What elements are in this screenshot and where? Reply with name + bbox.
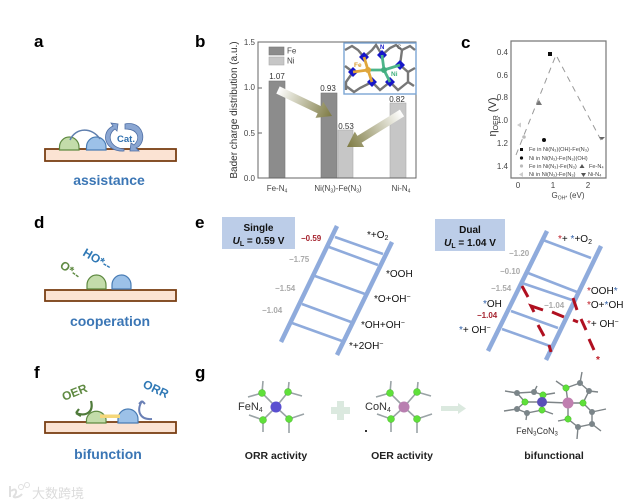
- panel: e single ladder: [195, 213, 413, 355]
- x labels: 3: [356, 188, 359, 194]
- species labels: −: [379, 341, 383, 348]
- arrow: Fe to Ni(N3)-Fe(N3): [276, 86, 332, 118]
- species labels: *+O: [367, 230, 385, 241]
- panel: d cooperation: [34, 213, 176, 329]
- y axis title: Bader charge distribution (a.u.): [229, 41, 240, 179]
- species labels: [349, 230, 413, 352]
- heading: f: f: [34, 363, 40, 382]
- callout: dual: = 1.04 V: [456, 238, 496, 249]
- arrow: ORR: [139, 401, 152, 419]
- y axis title: η: [487, 130, 499, 137]
- x labels: )-Fe(N: [333, 184, 356, 193]
- panel: c volcano plot: [461, 33, 606, 202]
- y tick labels: 1.0: [244, 83, 256, 92]
- panel: b bar chart: [195, 32, 416, 194]
- red dashed ladder: [522, 286, 594, 352]
- axes: [511, 41, 606, 178]
- energy values: −1.04: [262, 306, 283, 315]
- data points: [517, 52, 605, 142]
- y tick labels: 1.0: [497, 116, 509, 125]
- label: Cat.: Cat.: [117, 134, 135, 145]
- x labels: Ni(N: [314, 184, 330, 193]
- inset: structure: [344, 43, 416, 94]
- y tick labels: [497, 48, 509, 171]
- species labels: *O+*OH: [587, 300, 623, 311]
- arrow: Ni to Ni(N3)-Fe(N3): [347, 110, 404, 147]
- arrow: reaction: [441, 403, 466, 414]
- energy values: [477, 249, 565, 320]
- y tick labels: 1.2: [497, 139, 509, 148]
- callout: dual: Dual: [459, 225, 481, 236]
- y tick labels: 1.4: [497, 162, 509, 171]
- species labels: 2: [385, 235, 389, 242]
- x tick labels: 2: [586, 181, 591, 190]
- species labels: *+2OH: [349, 341, 379, 352]
- inset: structure: Fe: [354, 62, 362, 69]
- caption: ORR activity: ORR activity: [245, 450, 307, 462]
- label: OER: OER: [60, 381, 90, 404]
- green catalyst dome a: [60, 137, 79, 150]
- energy values: −1.20: [509, 249, 530, 258]
- legend: [519, 147, 604, 178]
- inset: structure: C: [397, 45, 402, 51]
- blue dome f: [118, 409, 138, 423]
- legend: Ni: [287, 56, 295, 66]
- heading: g: g: [195, 363, 205, 382]
- callout: dual: [435, 219, 505, 251]
- species labels: *+ OH: [459, 325, 487, 336]
- caption: bifunctional: bifunctional: [524, 450, 584, 462]
- x axis title: OH*: [558, 196, 567, 202]
- energy values: −0.10: [500, 267, 521, 276]
- species labels: *OOH: [386, 269, 413, 280]
- substrate f: [45, 422, 176, 433]
- panel: f bifunction: [10, 363, 176, 502]
- heading: d: d: [34, 213, 44, 232]
- y tick labels: 0.8: [497, 93, 509, 102]
- arrow: transfer between sites: [70, 130, 100, 140]
- energy values: −0.59: [301, 234, 322, 243]
- x labels: ): [359, 184, 362, 193]
- volcano dashed lines: [516, 55, 602, 155]
- molecule: FeN4: FeN: [238, 401, 259, 413]
- callout: single: L: [240, 241, 245, 248]
- species labels: −: [615, 319, 619, 326]
- energy values: −1.54: [275, 284, 296, 293]
- species labels: *+ OH: [587, 319, 615, 330]
- watermark: 大数跨境: [32, 483, 84, 502]
- callout: dual: L: [451, 243, 456, 250]
- green dome f: [86, 411, 106, 423]
- heading: c: c: [461, 33, 470, 52]
- heading: a: a: [34, 32, 44, 51]
- energy values: [262, 234, 322, 315]
- y tick labels: 0.0: [244, 174, 256, 183]
- y tick labels: 0.5: [244, 129, 256, 138]
- legend: Fe in Ni(N₃)(OH)-Fe(N₃): [529, 147, 589, 153]
- inset: structure: N: [380, 45, 384, 51]
- species labels: −: [487, 325, 491, 332]
- x axis title: (eV): [567, 191, 585, 200]
- label: O*: O*--: [57, 258, 83, 282]
- heading: b: b: [195, 32, 205, 51]
- molecule: CoN4: 4: [387, 407, 391, 414]
- value labels: 0.93: [320, 84, 336, 93]
- legend: [269, 46, 297, 66]
- value labels: 0.53: [338, 122, 354, 131]
- species labels: [459, 234, 623, 366]
- inset: structure: Ni: [391, 71, 398, 78]
- panel: e dual ladder: [435, 219, 623, 366]
- molecule: FeN3CoN3: FeN: [516, 426, 533, 436]
- legend: Ni in Ni(N₃)-Fe(N₃): [529, 172, 576, 178]
- x labels: 4: [284, 188, 288, 194]
- y tick labels: [244, 38, 256, 183]
- green dome d: [87, 275, 106, 289]
- watermark: [10, 482, 84, 502]
- molecule: FeN4: [238, 381, 304, 433]
- connector: [100, 414, 120, 418]
- panel: g molecules: [195, 363, 606, 462]
- molecule: FeN3CoN3: [504, 372, 606, 439]
- species labels: *OOH*: [587, 286, 618, 297]
- bars: [269, 81, 406, 178]
- species labels: *OH+OH: [361, 320, 401, 331]
- heading: e: e: [195, 213, 204, 232]
- callout: single: = 0.59 V: [244, 236, 285, 247]
- y tick labels: 0.6: [497, 71, 509, 80]
- y tick labels: 0.4: [497, 48, 509, 57]
- label: HO*: HO*--: [80, 245, 114, 273]
- legend: Ni in Ni(N₃)-Fe(N₃)(OH): [529, 156, 588, 162]
- energy values: −1.54: [491, 284, 512, 293]
- caption: bifunction: bifunction: [74, 446, 142, 462]
- x labels: 4: [408, 188, 411, 194]
- value labels: 1.07: [269, 72, 285, 81]
- x labels: [267, 184, 411, 194]
- y tick labels: 1.5: [244, 38, 256, 47]
- value labels: [269, 72, 405, 131]
- species labels: 2: [588, 239, 592, 246]
- x tick labels: 1: [551, 181, 556, 190]
- substrate a: [45, 149, 176, 161]
- caption: assistance: assistance: [73, 172, 145, 188]
- substrate d: [45, 290, 176, 301]
- molecule: FeN3CoN3: 3: [533, 432, 537, 438]
- x labels: Fe-N: [267, 184, 284, 193]
- molecule: CoN4: [365, 381, 432, 433]
- species labels: *+ *+O: [558, 234, 588, 245]
- x tick labels: [516, 181, 591, 190]
- icon: plus: [331, 401, 350, 420]
- x labels: Ni-N: [392, 184, 408, 193]
- blue catalyst dome a: [86, 137, 106, 150]
- ladder: [488, 231, 601, 360]
- energy values: −1.04: [477, 311, 498, 320]
- ladder: [281, 226, 392, 355]
- legend: Fe in Ni(N₃)-Fe(N₃): [529, 164, 577, 170]
- legend: Fe: [287, 46, 297, 56]
- x axis title: G: [551, 191, 558, 200]
- arrow: catalytic cycle: [105, 123, 143, 151]
- species labels: −: [401, 320, 405, 327]
- molecule: FeN4: 4: [259, 407, 263, 414]
- y axis title: OER: [493, 115, 500, 130]
- blue dome d: [112, 275, 131, 289]
- label: ORR: ORR: [141, 377, 171, 401]
- callout: single: U: [233, 236, 241, 247]
- energy values: −1.04: [544, 301, 565, 310]
- molecule: FeN3CoN3: 3: [555, 432, 559, 438]
- species labels: *OH: [483, 299, 502, 310]
- panel: a assistance: [34, 32, 176, 188]
- arrow: OER: [76, 401, 92, 416]
- species labels: −: [407, 294, 411, 301]
- callout: single: Single: [243, 223, 274, 234]
- energy values: −1.75: [289, 255, 310, 264]
- x tick labels: 0: [516, 181, 521, 190]
- value labels: 0.82: [389, 95, 405, 104]
- callout: single: [222, 217, 295, 249]
- caption: OER activity: OER activity: [371, 450, 433, 462]
- species labels: *O+OH: [374, 294, 407, 305]
- axes: [258, 42, 416, 178]
- species labels: *: [596, 355, 600, 366]
- molecule: CoN4: CoN: [365, 401, 387, 413]
- callout: dual: U: [444, 238, 452, 249]
- y axis title: (V): [487, 97, 499, 115]
- legend: Ni-N₄: [588, 172, 602, 178]
- caption: cooperation: cooperation: [70, 313, 150, 329]
- molecule: FeN3CoN3: CoN: [536, 426, 555, 436]
- legend: Fe-N₄: [589, 164, 604, 170]
- x labels: 3: [330, 188, 333, 194]
